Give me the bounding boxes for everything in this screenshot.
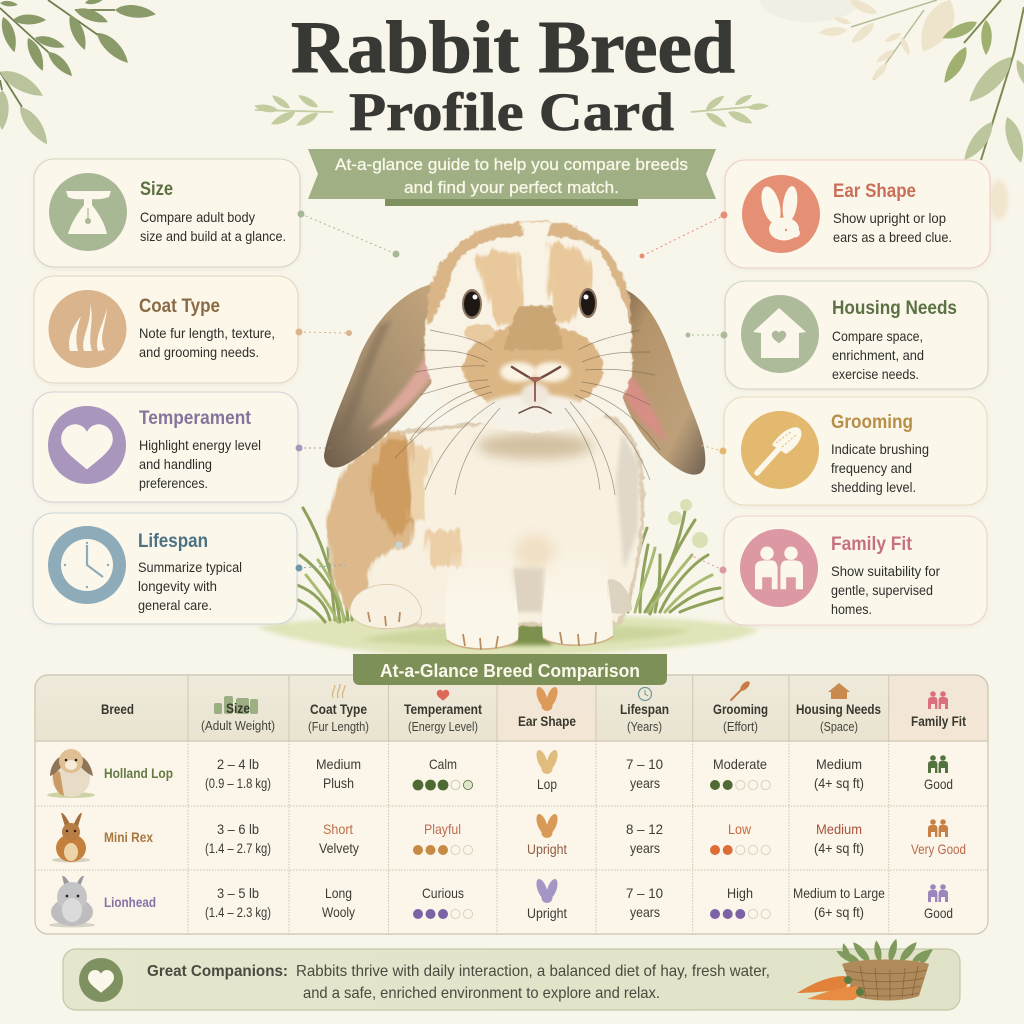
card: grooming [720,397,987,505]
title ornament: left sprig [254,92,333,129]
icon: heart [48,406,126,484]
text: temperament description: preferences. [139,475,208,491]
rabbit face markings [463,243,603,430]
thumbnail: mini rex [52,813,90,862]
icon: clock [48,526,126,604]
text: grooming description [831,441,929,495]
banner text [147,963,770,1002]
row: mini rex: Medium [816,821,862,837]
heading: lifespan: Lifespan [138,531,208,552]
table header row: Housing Needs [796,701,881,717]
row: holland lop: Moderate [713,756,767,772]
row: holland lop: Lop [537,776,557,792]
text: lifespan description: general care. [138,597,212,613]
text: ear shape description: Show upright or lop [833,210,946,226]
row: mini rex: Velvety [319,840,359,856]
rabbit head [425,221,633,432]
text: housing needs description: exercise needs. [832,366,919,382]
row: mini rex: Playful [424,821,461,837]
card: housing needs [720,281,988,389]
text: coat type description: and grooming needs. [139,344,259,360]
row: holland lop: Good [924,776,953,792]
text: family fit description: Show suitability for [831,563,940,579]
table header row: Breed [101,701,134,717]
table header row: Ear Shape [518,713,576,729]
table header row: (Space) [820,719,858,734]
rabbit left ear [324,282,452,468]
row: lionhead: Wooly [322,904,355,920]
text: lifespan description: longevity with [138,578,217,594]
icon: brush [741,411,819,489]
thumbnail: lionhead [49,876,95,928]
table header row: Grooming [713,701,768,717]
subtitle ribbon: At-a-glance guide to help you compare breeds [335,155,688,174]
text: ear shape description [833,210,952,245]
comparison table [35,675,988,934]
decorative leaves: top left [0,0,156,148]
card: ear shape [720,160,990,268]
heading: family fit: Family Fit [831,534,913,555]
icon: fur [48,290,126,368]
row: lionhead: Curious [422,885,464,901]
rabbit legs and paws [350,545,632,650]
icon: family [740,529,818,607]
table header row: (Energy Level) [408,719,478,734]
heading: grooming: Grooming [831,412,913,433]
title: Rabbit Breed [291,7,735,89]
table header row: Temperament [404,701,482,717]
row: holland lop: 7 – 10 [626,756,663,772]
subtitle ribbon [308,149,716,206]
row: mini rex: Very Good [911,841,966,857]
row: mini rex: Upright [527,841,567,857]
text: grooming description: Indicate brushing [831,441,929,457]
row: mini rex: 8 – 12 [626,821,663,837]
connector lines [299,214,725,570]
row: holland lop: Plush [323,775,354,791]
text: lifespan description [138,559,242,613]
heading: housing needs: Housing Needs [832,298,957,319]
icon: scale [49,173,127,251]
row: holland lop: (0.9 – 1.8 kg) [205,776,271,791]
card: temperament [33,392,302,502]
row: lionhead: Good [924,905,953,921]
table header row [101,680,966,734]
table header row: (Effort) [723,719,758,734]
text: size description: Compare adult body [140,209,255,225]
text: coat type description [139,325,275,360]
heading: ear shape: Ear Shape [833,181,916,202]
row: mini rex: Low [728,821,752,837]
thumbnail: holland lop [47,749,95,798]
row: lionhead: Lionhead [104,894,156,910]
row: lionhead: (1.4 – 2.3 kg) [205,905,271,920]
row: holland lop: Holland Lop [104,765,173,781]
row: lionhead: 3 – 5 lb [217,885,259,901]
row: holland lop: Medium [816,756,862,772]
row: holland lop: Calm [429,756,457,772]
text: ear shape description: ears as a breed clue. [833,229,952,245]
icon: heart badge [79,958,123,1002]
row: lionhead: Medium to Large [793,885,885,901]
table header row: Size [226,700,250,716]
table header row: (Fur Length) [308,719,369,734]
row: holland lop: Medium [316,756,361,772]
row: mini rex: Short [323,821,353,837]
text: lifespan description: Summarize typical [138,559,242,575]
illustration: holland lop rabbit [324,221,705,650]
text: temperament description: Highlight energy level [139,437,261,453]
title: Profile Card [349,82,674,142]
heading: coat type: Coat Type [139,296,220,317]
rabbit flank markings [329,430,640,618]
card: family fit [720,516,987,625]
title ornament: right sprig [691,92,769,130]
table heading pill: At-a-Glance Breed Comparison [380,661,640,681]
rabbit body [328,410,644,628]
table header row: (Years) [627,719,662,734]
banner text: and a safe, enriched environment to explore and relax. [303,985,660,1002]
row: lionhead: High [727,885,753,901]
table header row: Coat Type [310,701,367,717]
heading: size: Size [140,179,173,200]
row: lionhead: (6+ sq ft) [814,904,864,920]
table heading pill [353,654,667,685]
row: lionhead [49,876,953,928]
text: coat type description: Note fur length, texture, [139,325,275,341]
illustration: basket with carrots [797,938,934,1000]
row: lionhead: Long [325,885,352,901]
table header row: Lifespan [620,701,669,717]
ground and grass [258,499,758,658]
banner text: Great Companions: [147,963,288,980]
text: family fit description [831,563,940,617]
text: housing needs description: Compare space, [832,328,923,344]
banner text: Rabbits thrive with daily interaction, a balanced diet of hay, fresh water, [296,963,770,980]
row: mini rex: (1.4 – 2.7 kg) [205,841,271,856]
row: holland lop: years [630,775,660,791]
decorative leaves: top right [760,0,1024,220]
card: size [34,159,304,267]
row: lionhead: Upright [527,905,567,921]
table background [36,676,988,740]
row: mini rex [52,813,966,862]
row: holland lop: 2 – 4 lb [217,756,259,772]
rabbit whiskers [395,330,660,495]
table header row: (Adult Weight) [201,718,275,733]
icon: rabbit head [742,175,820,253]
text: size description: size and build at a glance. [140,228,286,244]
title [291,7,735,142]
row: mini rex: Mini Rex [104,829,153,845]
heading: temperament: Temperament [139,408,252,429]
row: mini rex: 3 – 6 lb [217,821,259,837]
card: coat type [34,276,302,383]
text: temperament description: and handling [139,456,212,472]
rabbit eyes [462,288,597,319]
row: lionhead: years [630,904,660,920]
text: grooming description: shedding level. [831,479,916,495]
text: grooming description: frequency and [831,460,912,476]
text: family fit description: homes. [831,601,872,617]
row: mini rex: years [630,840,660,856]
row: holland lop [47,749,953,798]
text: temperament description [139,437,261,491]
rabbit nose and mouth [512,367,560,413]
text: housing needs description: enrichment, and [832,347,924,363]
text: size description [140,209,286,244]
text: housing needs description [832,328,924,382]
row: lionhead: 7 – 10 [626,885,663,901]
row: mini rex: (4+ sq ft) [814,840,864,856]
icon: house [741,295,819,373]
card: lifespan [33,513,302,624]
bottom banner [63,938,960,1010]
rabbit right ear [605,285,705,475]
table header row: Family Fit [911,713,966,729]
subtitle ribbon: and find your perfect match. [404,178,619,197]
row: holland lop: (4+ sq ft) [814,775,864,791]
text: family fit description: gentle, supervised [831,582,933,598]
